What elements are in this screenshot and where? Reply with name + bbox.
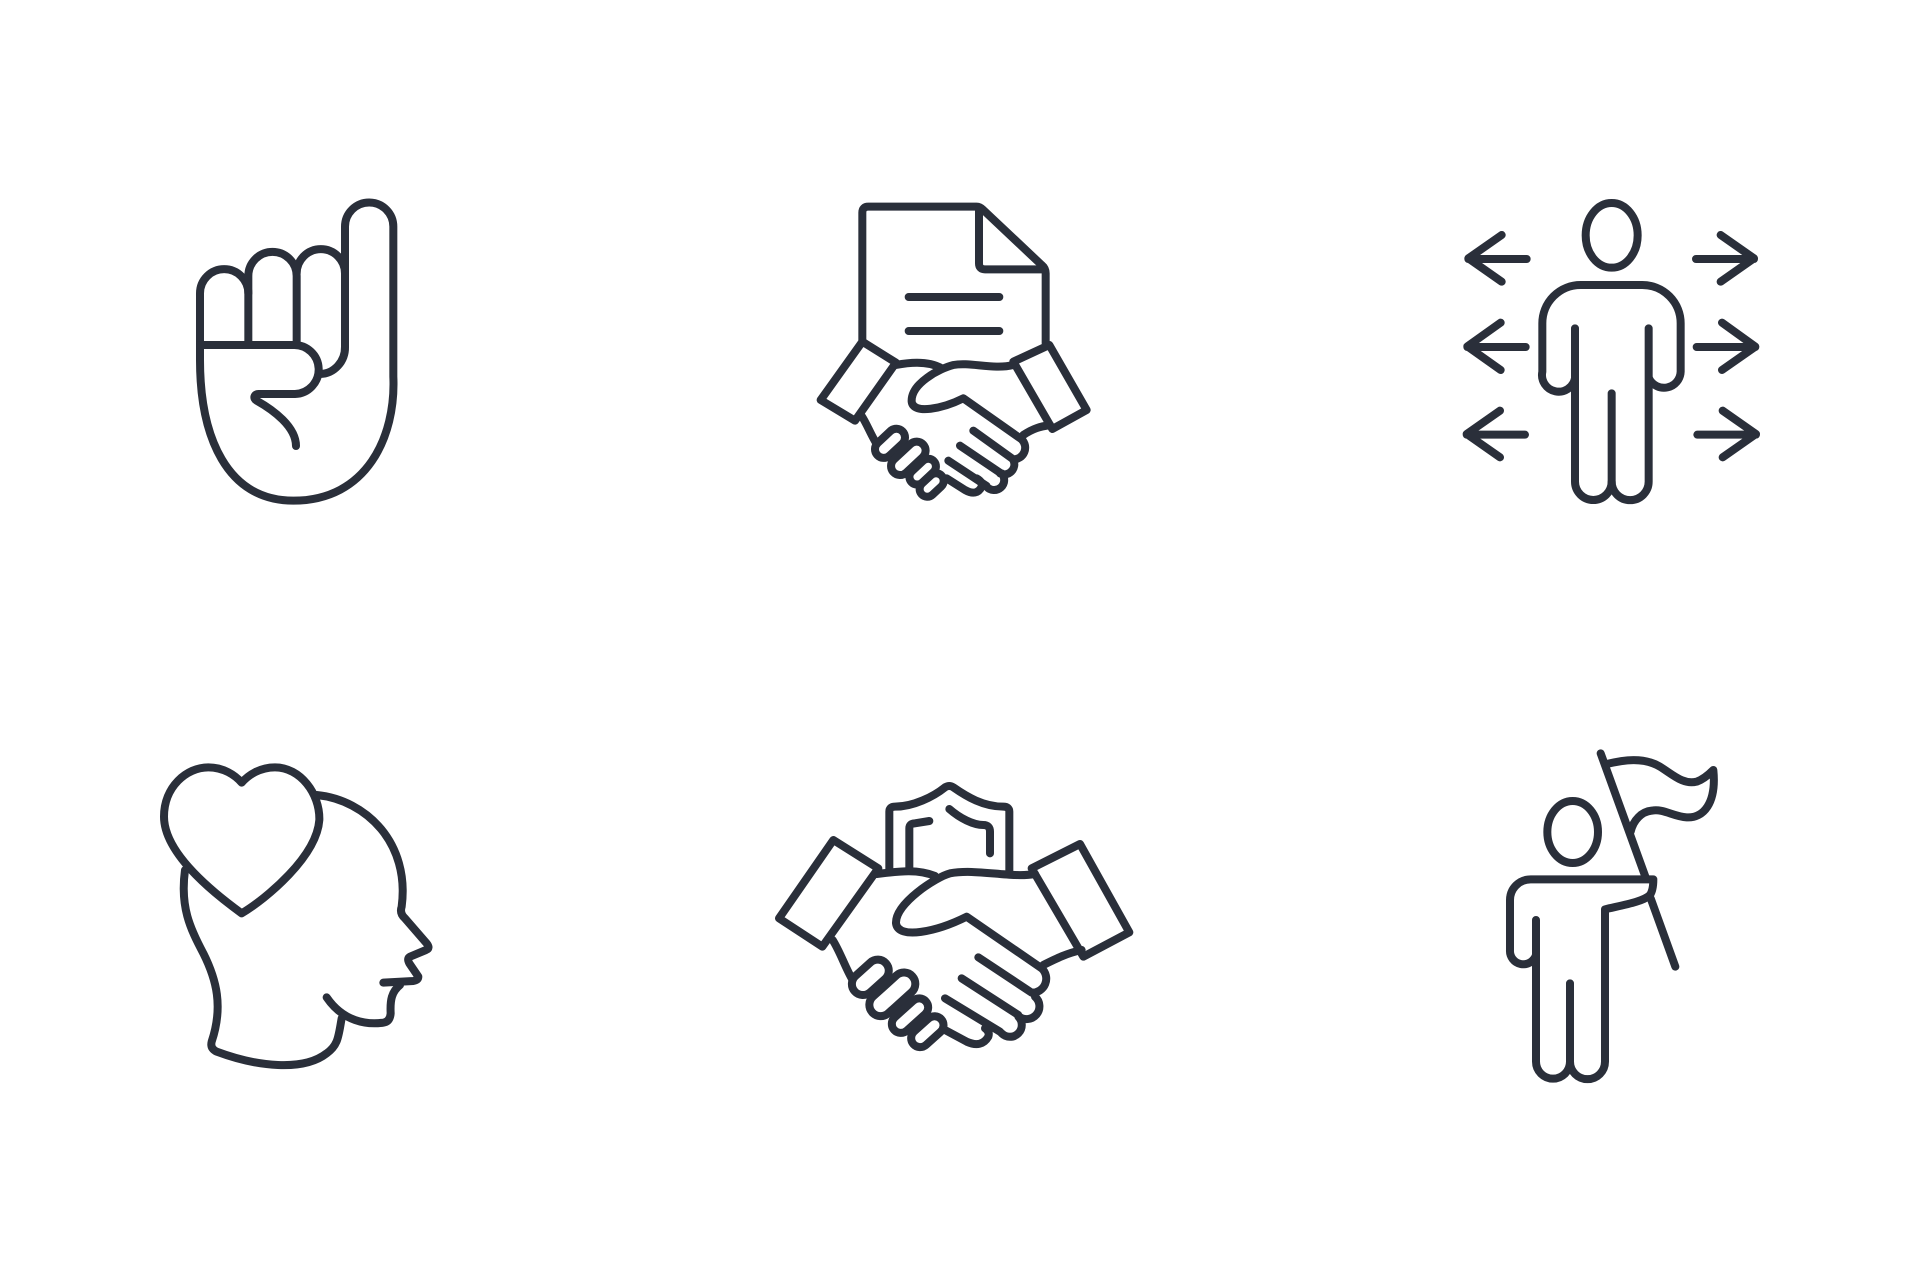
neck and back of head	[184, 870, 342, 1065]
icon: person with arrows in all directions	[1467, 203, 1756, 500]
body	[1510, 879, 1653, 1079]
left cuff	[779, 840, 878, 947]
icon: head with heart	[164, 767, 429, 1065]
icon: hand with raised little finger	[200, 202, 393, 501]
icon: person holding flag	[1510, 753, 1714, 1079]
right cuff	[1013, 345, 1087, 429]
clasped hands	[877, 871, 935, 876]
left arrows	[1467, 235, 1527, 457]
face profile	[317, 795, 429, 983]
chin	[327, 985, 400, 1023]
icon: handshake with document	[821, 207, 1087, 500]
flag pole	[1601, 753, 1675, 967]
flag	[1607, 760, 1714, 832]
document lines	[909, 297, 999, 331]
body	[1542, 285, 1681, 392]
icon: handshake with money	[779, 786, 1129, 1051]
clasped hands	[896, 363, 942, 368]
right arrows	[1696, 235, 1756, 457]
banknote	[889, 786, 1009, 873]
head	[1547, 801, 1598, 863]
document	[862, 207, 1046, 343]
left cuff	[821, 342, 896, 421]
head	[1586, 203, 1638, 268]
right cuff	[1032, 844, 1129, 957]
heart	[164, 767, 319, 913]
document fold	[979, 208, 1043, 269]
